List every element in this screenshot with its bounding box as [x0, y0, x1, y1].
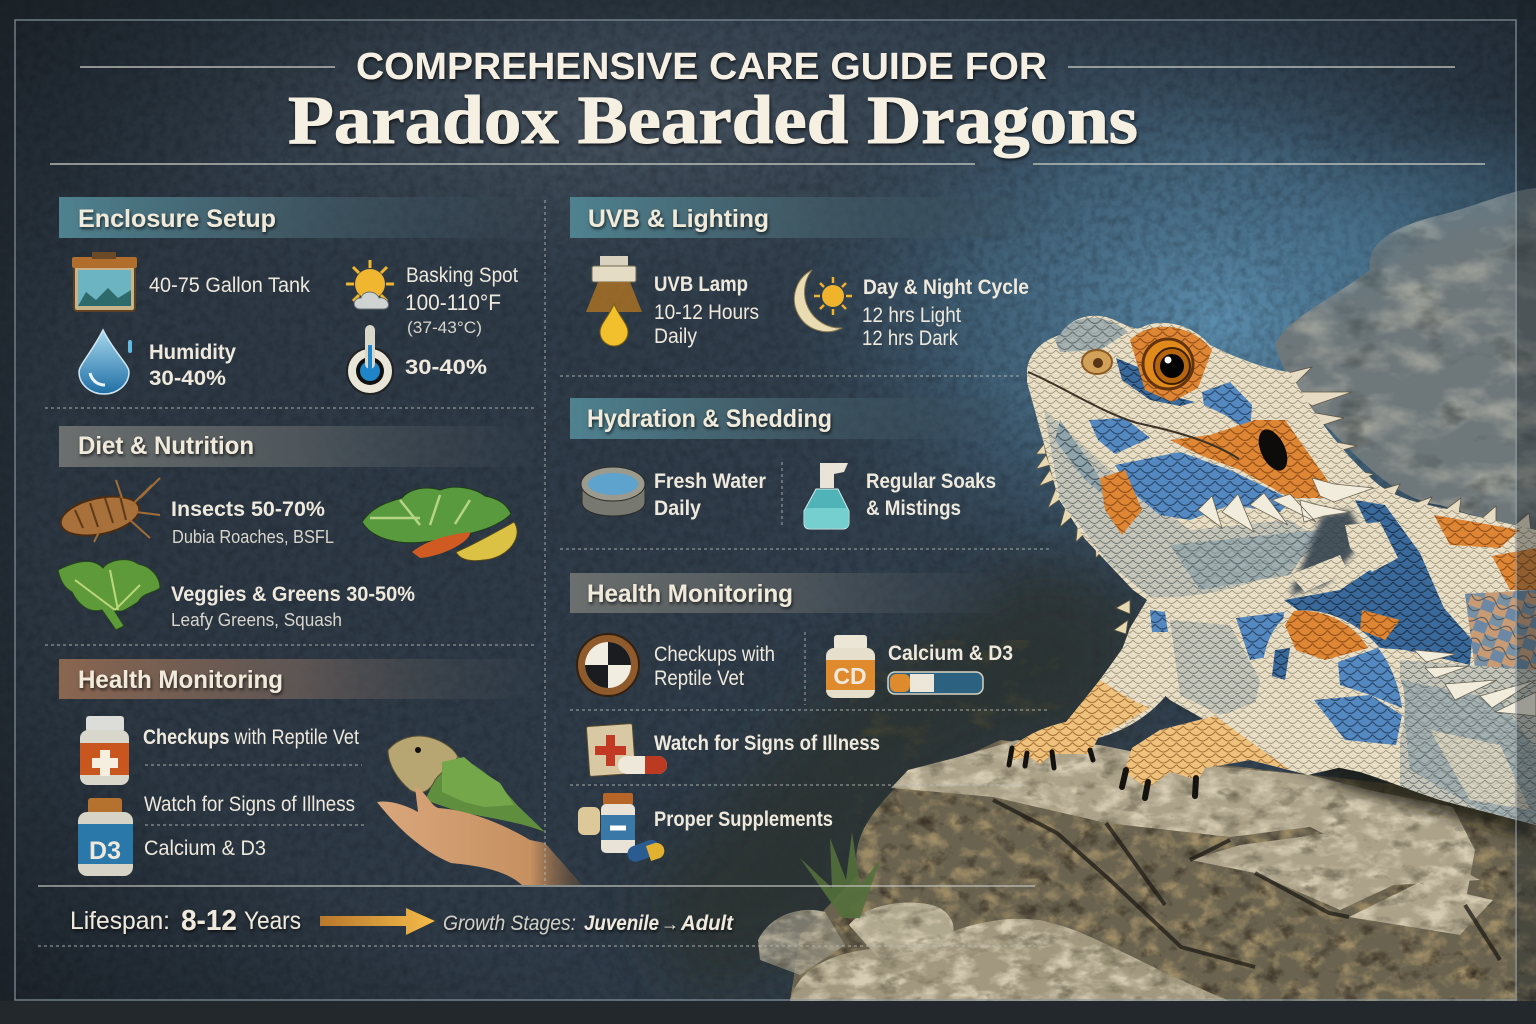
text: fresh water [654, 470, 766, 520]
lizard illustration [1008, 316, 1536, 840]
lizard neck shadow [1290, 510, 1365, 595]
section dividers [38, 200, 1050, 946]
footer: growth stages: Adult [680, 912, 734, 935]
rocks [758, 740, 1536, 1001]
heading: Hydration & Shedding [587, 405, 832, 433]
text: day night cycle [862, 276, 1029, 350]
footer: lifespan: Years [244, 907, 301, 935]
footer: lifespan: Lifespan: [70, 907, 170, 935]
heading [59, 426, 535, 467]
heading [59, 197, 539, 238]
text: calcium: Calcium & D3 [888, 642, 1013, 665]
text: UVB lamp: UVB Lamp [654, 273, 748, 296]
footer: growth stages: → [661, 914, 679, 934]
text: supplements: Proper Supplements [654, 808, 833, 831]
icon: water bowl [581, 467, 645, 516]
footer: growth stages: Juvenile [584, 912, 659, 935]
icon: hand holding dragon [377, 736, 582, 885]
text: UVB lamp: 10-12 Hours [654, 301, 759, 324]
heading: UVB & Lighting [588, 205, 769, 233]
claws [1122, 770, 1196, 798]
text: tank size: 40-75 Gallon Tank [149, 274, 310, 297]
text: day night cycle: 12 hrs Dark [862, 327, 958, 350]
panel: right health monitoring [570, 573, 1013, 864]
claws [1009, 748, 1093, 768]
text: basking spot: (37-43°C) [407, 318, 482, 337]
rock: base mass [790, 740, 1536, 1001]
footer: growth stages: Growth Stages: [443, 912, 576, 935]
text: fresh water: Fresh Water [654, 470, 766, 493]
icon: CD bottle [826, 635, 875, 698]
lizard shadow [1110, 690, 1536, 840]
panel: left health monitoring [59, 659, 582, 885]
text: soaks [866, 470, 996, 520]
icon: first aid card [586, 723, 667, 777]
lizard front arm [1008, 639, 1172, 768]
lower flank [1400, 660, 1536, 830]
title: COMPREHENSIVE CARE GUIDE FOR [356, 46, 1047, 88]
small dragon [388, 736, 545, 832]
icon: roach [57, 478, 160, 542]
text: insects: Dubia Roaches, BSFL [172, 527, 334, 547]
icon: salad [362, 487, 517, 561]
icon: capsule bar [888, 672, 983, 694]
text: basking spot: 100-110°F [405, 290, 501, 315]
hand [377, 787, 582, 885]
icon: sun and cloud [346, 260, 394, 309]
mouth line [1028, 372, 1239, 459]
background rock [1275, 160, 1536, 535]
text: day night cycle: Day & Night Cycle [863, 276, 1029, 299]
footer: growth stages [443, 912, 734, 935]
title rules [50, 67, 1485, 164]
icon: CD bottle: CD [833, 663, 867, 689]
text: checkups: Reptile Vet [654, 667, 744, 690]
text: basking spot: Basking Spot [406, 264, 518, 287]
lizard head-top tint [1055, 318, 1128, 352]
title: Paradox Bearded Dragons [288, 82, 1138, 158]
icon: thermometer [347, 325, 393, 394]
orange head markings [1130, 327, 1212, 402]
icon: D3 bottle: D3 [89, 837, 121, 865]
text: humidity: Humidity [149, 341, 236, 364]
icon: spray bottle [804, 463, 849, 529]
white beard spikes [1198, 478, 1536, 716]
dark mossy ledge [640, 560, 1140, 1000]
rock: small stone [849, 902, 954, 960]
text: soaks: Regular Soaks [866, 470, 996, 493]
shoulder grey [1170, 620, 1260, 714]
text: checkups: Checkups with Reptile Vet [143, 726, 359, 749]
text: veggies: Leafy Greens, Squash [171, 610, 342, 630]
rock: right lit slab [1349, 883, 1493, 935]
footer rule [38, 885, 1035, 887]
panel: hydration and shedding [570, 398, 1010, 529]
text: humidity [149, 341, 236, 390]
text: humidity: 30-40% [149, 367, 226, 390]
heading [570, 573, 1000, 613]
heading [59, 659, 535, 699]
text: basking spot [405, 264, 518, 337]
icon: tank [72, 252, 137, 311]
heading: Enclosure Setup [78, 205, 276, 233]
heading: Health Monitoring [587, 580, 793, 608]
heading: Diet & Nutrition [78, 432, 254, 460]
footer: lifespan [70, 905, 301, 937]
panel: enclosure setup [59, 197, 539, 394]
text: day night cycle: 12 hrs Light [862, 304, 961, 327]
text: UVB lamp [654, 273, 759, 348]
panel: diet and nutrition [57, 426, 535, 630]
rock: far left stone [758, 910, 845, 975]
icon: moon and sun [794, 270, 852, 332]
lizard spikes back [1036, 367, 1531, 634]
text: watch illness: Watch for Signs of Illness [654, 732, 880, 755]
plant [800, 832, 880, 918]
title [288, 46, 1138, 158]
text: checkups: Checkups with [654, 643, 775, 666]
text: fresh water: Daily [654, 497, 701, 520]
icon: D3 bottle [78, 798, 133, 876]
icon: vet shield [577, 634, 639, 696]
rock cracks [993, 800, 1500, 967]
text: soaks: & Mistings [866, 497, 961, 520]
text: insects [171, 498, 334, 547]
icon: water drop [79, 330, 132, 394]
rock: bottom stones [790, 919, 1230, 1001]
footer: lifespan: 8-12 [181, 905, 237, 937]
blue head markings [1116, 358, 1195, 406]
lizard body [1027, 316, 1536, 830]
lizard eye [1082, 339, 1293, 475]
arrow [320, 908, 435, 935]
text: checkups [654, 643, 775, 690]
icon: supplements [578, 793, 664, 864]
text: UVB lamp: Daily [654, 325, 697, 348]
lizard rear arm [1122, 610, 1405, 798]
text: calcium: Calcium & D3 [144, 837, 266, 860]
text: veggies: Veggies & Greens 30-50% [171, 583, 415, 606]
text: watch for illness: Watch for Signs of Illness [144, 793, 355, 816]
dorsal markings [1434, 515, 1520, 548]
heading: Health Monitoring [78, 666, 283, 694]
text: second humidity value: 30-40% [405, 356, 487, 379]
text: insects: Insects 50-70% [171, 498, 325, 521]
lizard throat [1044, 410, 1322, 597]
heading [570, 398, 1010, 439]
icon: medicine bottle [80, 716, 129, 785]
rock: second lit slab [1190, 833, 1480, 910]
heading [570, 197, 1040, 238]
text: veggies [171, 583, 415, 630]
rock: upper lit slab [891, 740, 1475, 905]
icon: UVB lamp [586, 256, 642, 346]
icon: leafy greens [58, 560, 160, 630]
panel: UVB and lighting [570, 197, 1040, 350]
